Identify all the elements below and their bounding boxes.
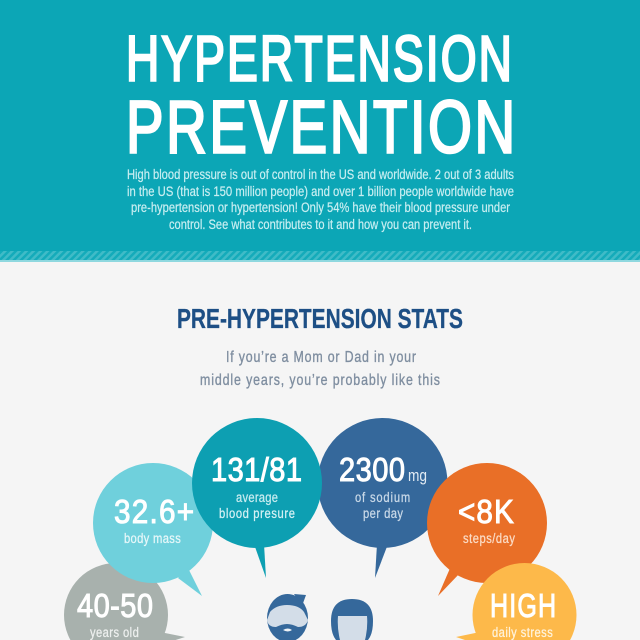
bubble: sodium bbox=[318, 418, 448, 578]
intro paragraph bbox=[127, 167, 514, 232]
intro paragraph: in the US (that is 150 million people) and over 1 billion people worldwide have bbox=[127, 184, 514, 199]
section subheading: If you’re a Mom or Dad in your bbox=[226, 348, 416, 365]
bubble: age: 40-50 bbox=[77, 587, 153, 624]
bubble: sodium: mg bbox=[408, 466, 427, 485]
bubble: blood pressure: 131/81 bbox=[211, 451, 302, 488]
section heading: PRE-HYPERTENSION STATS bbox=[177, 303, 463, 334]
bubble: stress: daily stress bbox=[492, 625, 553, 640]
bubble: sodium: 2300 bbox=[339, 451, 405, 488]
header panel bbox=[0, 0, 640, 262]
bubble: sodium: per day bbox=[363, 506, 404, 521]
bubble: age bbox=[64, 563, 185, 640]
bubble: stress bbox=[456, 563, 576, 640]
section subheading: middle years, you’re probably like this bbox=[200, 371, 440, 388]
bubble: blood pressure: blood presure bbox=[219, 506, 295, 521]
icon: bearded man bbox=[267, 594, 308, 640]
intro paragraph: control. See what contributes to it and how you can prevent it. bbox=[169, 217, 472, 232]
bubble: stress: HIGH bbox=[490, 588, 556, 625]
bubble: blood pressure: average bbox=[236, 490, 278, 505]
bubble: age: years old bbox=[90, 625, 139, 640]
title: HYPERTENSION bbox=[126, 23, 512, 94]
bubble: steps: <8K bbox=[458, 494, 514, 530]
bubble: steps: steps/day bbox=[463, 531, 516, 546]
section subheading bbox=[200, 348, 440, 388]
bubble: body mass bbox=[93, 463, 213, 596]
bubble: blood pressure bbox=[192, 418, 322, 578]
title bbox=[126, 23, 515, 168]
bubble: sodium: of sodium bbox=[355, 490, 410, 505]
bubble: body mass: 32.6+ bbox=[114, 494, 194, 530]
intro paragraph: pre-hypertension or hypertension! Only 54% have their blood pressure under bbox=[131, 200, 510, 215]
intro paragraph: High blood pressure is out of control in the US and worldwide. 2 out of 3 adults bbox=[127, 167, 514, 182]
bubble: body mass: body mass bbox=[124, 531, 181, 546]
icon: woman bbox=[331, 599, 373, 640]
bubble: steps bbox=[427, 463, 547, 596]
title: PREVENTION bbox=[126, 86, 515, 168]
